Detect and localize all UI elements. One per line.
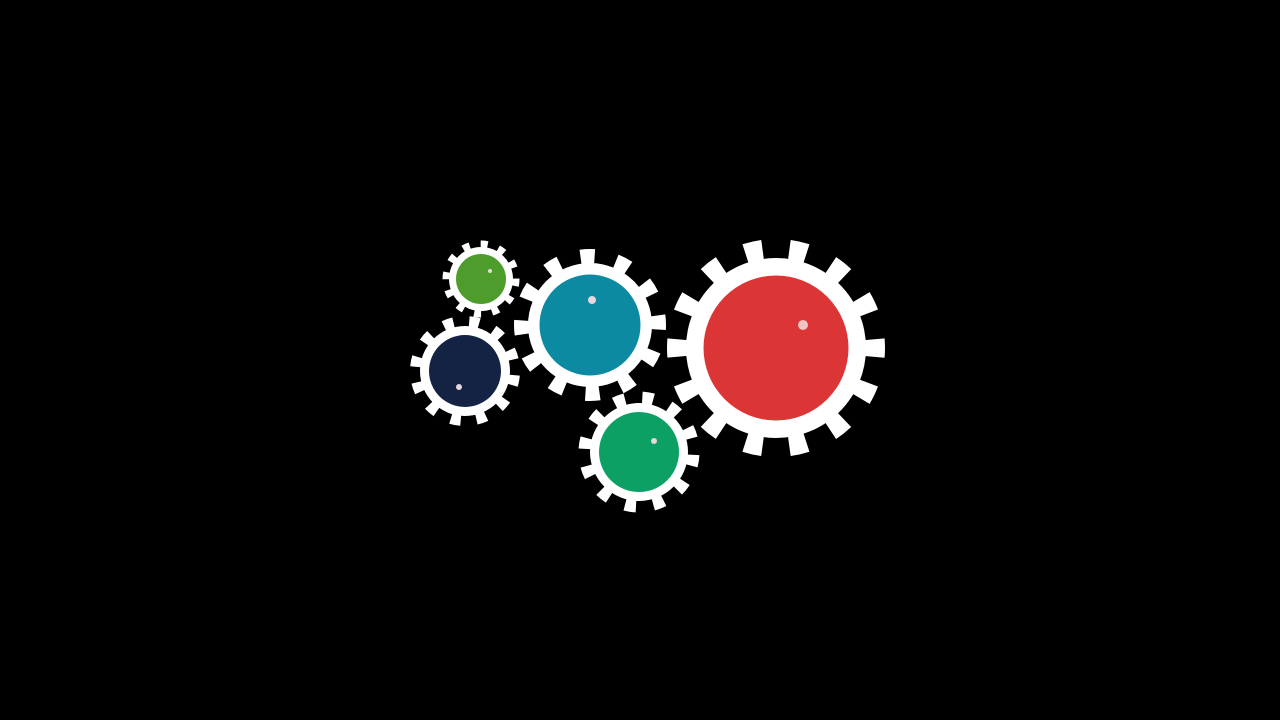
gear: teal bbox=[513, 248, 667, 402]
gear: navy bbox=[412, 318, 518, 424]
gear: green bbox=[582, 395, 696, 509]
gear: small green bbox=[446, 244, 516, 314]
gear: red large bbox=[669, 241, 883, 455]
